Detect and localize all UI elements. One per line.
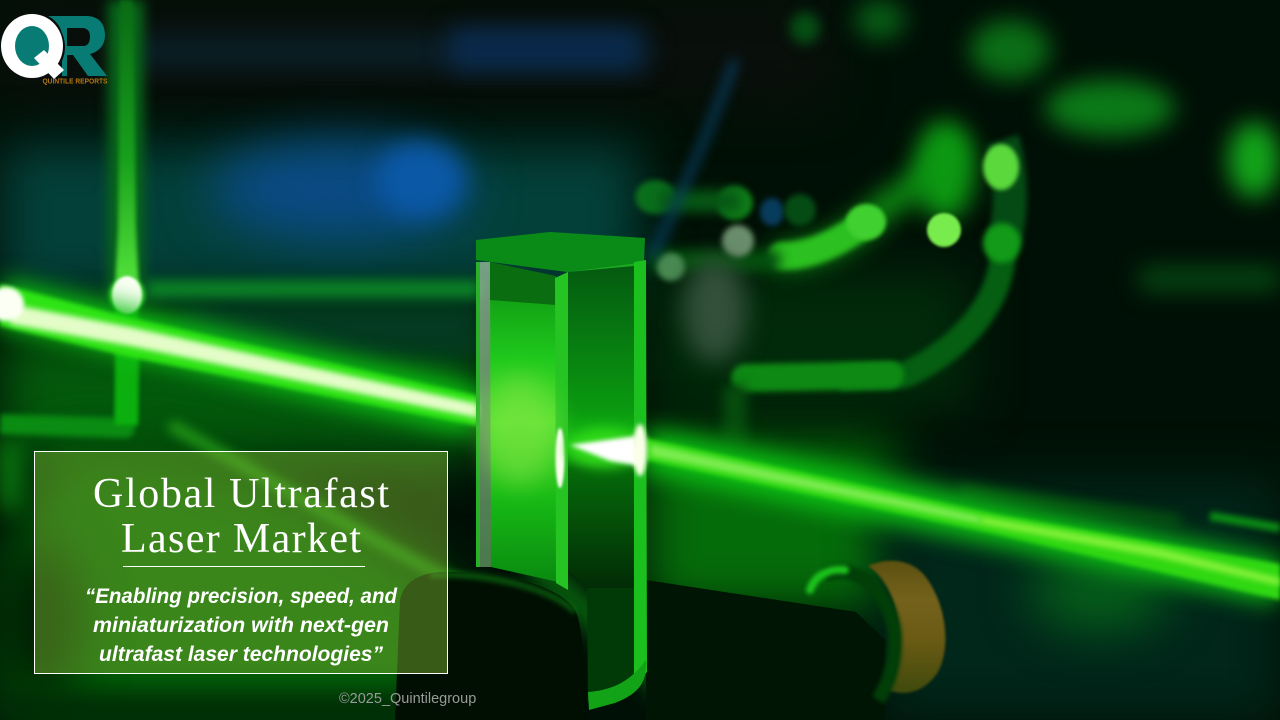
title panel (34, 451, 448, 674)
bright focal point inside cuvette (567, 424, 647, 476)
laser beam leaving cuvette (645, 438, 1280, 600)
title underline (123, 566, 365, 567)
logo letter R (48, 16, 107, 76)
logo letter Q (1, 14, 65, 80)
lens holder and dark mounts (395, 572, 885, 720)
tagline: “Enabling precision, speed, and (85, 585, 398, 608)
tagline: ultrafast laser technologies” (99, 643, 383, 666)
logo caption: QUINTILE REPORTS (42, 78, 108, 86)
blurred green reflections, upper right (0, 0, 1280, 528)
laser beam entering cuvette (0, 284, 478, 426)
tagline: miniaturization with next-gen (93, 614, 389, 637)
gold focus ring (810, 561, 945, 700)
copyright note: ©2025_Quintilegroup (339, 691, 476, 707)
glass cuvette (476, 232, 647, 710)
title (93, 471, 389, 562)
tagline (85, 585, 398, 666)
logo: Quintile Reports (1, 14, 108, 86)
title: Laser Market (121, 516, 361, 562)
vertical laser beam, left (108, 0, 145, 425)
title: Global Ultrafast (93, 471, 389, 517)
